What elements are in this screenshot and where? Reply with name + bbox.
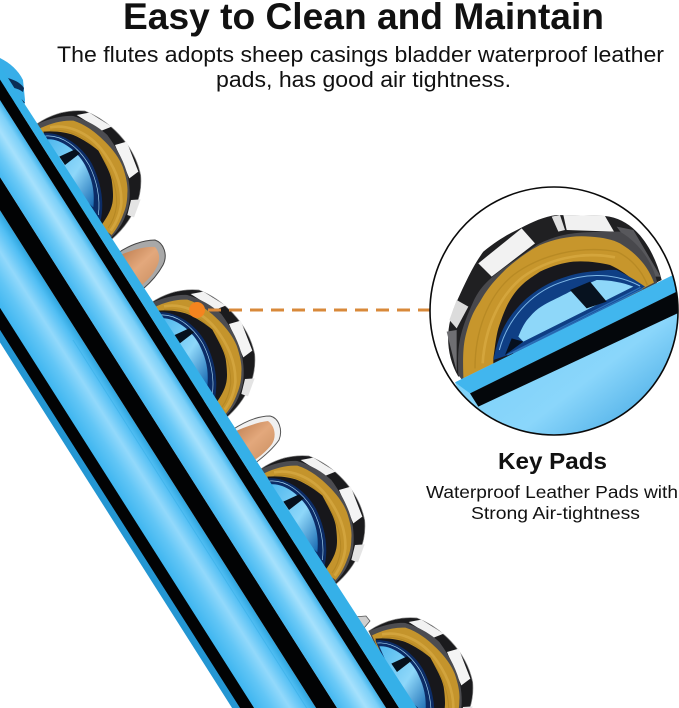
- callout heading: Key Pads: [498, 448, 607, 474]
- flute head ring: [0, 72, 25, 104]
- flute head joint: [0, 58, 25, 112]
- magnified flute tube: [455, 272, 679, 447]
- callout description: Waterproof Leather Pads with: [426, 482, 678, 502]
- key pad 3: [261, 456, 365, 584]
- cork tab 1: [118, 240, 165, 289]
- callout description: Strong Air-tightness: [471, 503, 640, 523]
- cork tab 2: [231, 416, 281, 464]
- magnified gold pad: [463, 236, 654, 382]
- subtitle text: pads, has good air tightness.: [216, 67, 511, 92]
- key pad 2: [151, 290, 255, 418]
- tube edge highlight: [22, 100, 417, 708]
- callout dot: [189, 302, 205, 318]
- magnified rim: [448, 215, 662, 377]
- callout dashed leader line: [208, 308, 430, 312]
- magnified blue cup: [493, 270, 645, 360]
- subtitle text: [57, 42, 664, 92]
- key pad 1: [37, 111, 141, 239]
- magnified key pad circle: [430, 187, 679, 447]
- key pad 4: [369, 618, 473, 708]
- subtitle text: The flutes adopts sheep casings bladder waterproof leather: [57, 42, 664, 67]
- magnified dark seat: [493, 261, 637, 367]
- flute body: [0, 40, 417, 708]
- icon: flute keys and cork tabs: [37, 111, 473, 708]
- callout description: [426, 482, 678, 523]
- small tab 3: [353, 616, 370, 628]
- tube stripes: [0, 40, 408, 708]
